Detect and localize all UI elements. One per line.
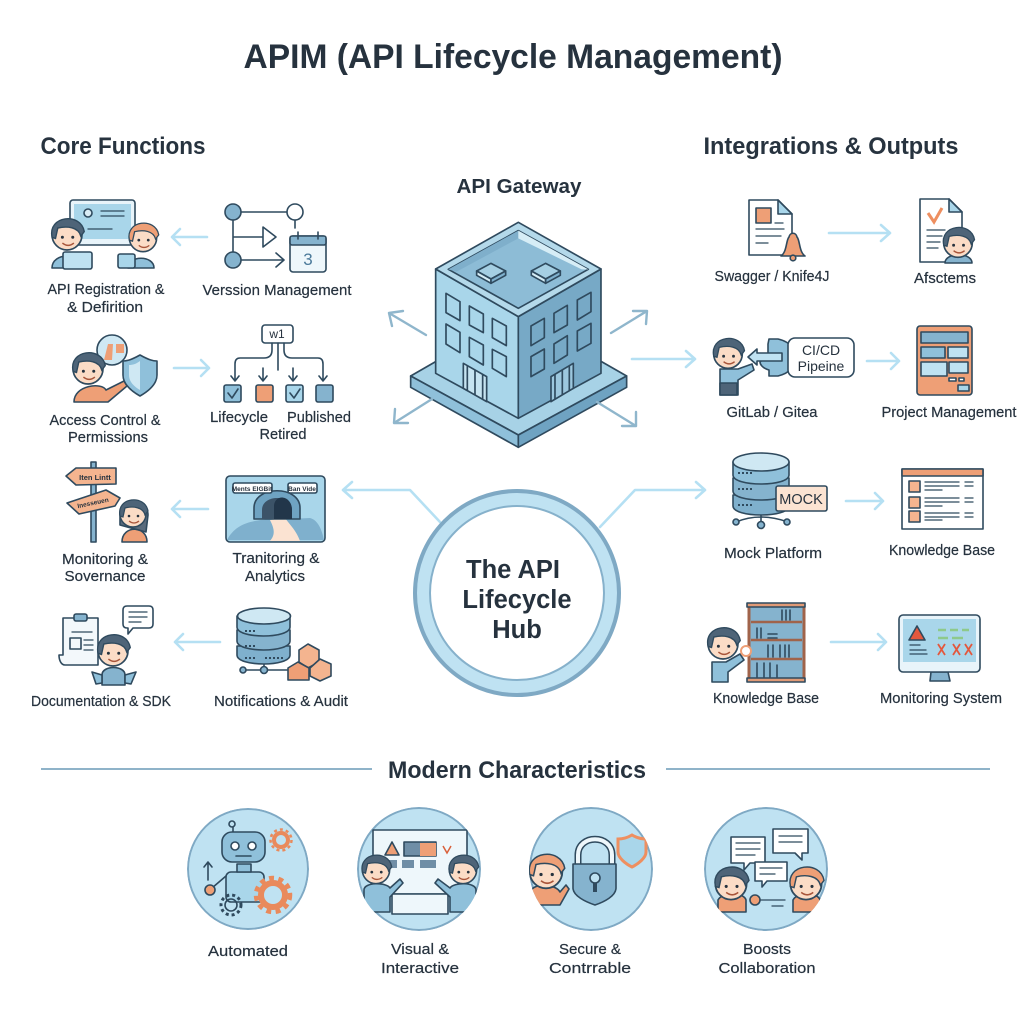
icon: knowledge base window — [902, 469, 983, 529]
label: lifecycle: Lifecycle — [210, 410, 268, 426]
central hub — [415, 491, 619, 695]
label: monitoring: Monitoring & — [62, 552, 148, 568]
arrow: building to CI/CD — [632, 351, 695, 367]
arrow: hub to mock platform — [600, 482, 705, 527]
icon: person with CI/CD pipeline: CI/CD — [802, 342, 840, 358]
label: knowledge base shelf: Knowledge Base — [713, 691, 819, 707]
arrow: building up right — [611, 311, 647, 333]
icon: mock platform: MOCK — [779, 492, 823, 508]
icon: person with CI/CD pipeline — [713, 338, 854, 395]
icon: API gateway building — [411, 222, 627, 447]
icon: database and cubes — [237, 608, 331, 681]
heading: API gateway: API Gateway — [456, 175, 582, 198]
label: published: Published — [287, 410, 351, 426]
icon: lifecycle tree: w1 — [268, 327, 285, 341]
label: analytics: Analytics — [245, 569, 305, 585]
arrow: swagger to artefacts — [829, 225, 890, 241]
title: APIM (API Lifecycle Management) — [244, 38, 782, 76]
label: retired: Retired — [260, 427, 306, 443]
heading: modern characteristics: Modern Characteristics — [388, 757, 646, 784]
icon: lifecycle tree — [224, 325, 333, 402]
arrow: building down right — [597, 402, 636, 426]
label: documentation: Documentation & SDK — [31, 694, 171, 710]
icon: signpost and person — [66, 462, 148, 542]
icon: access control — [73, 335, 157, 402]
icon: document and person — [920, 199, 974, 263]
badge: boosts collaboration — [705, 808, 827, 930]
icon: project management panel — [917, 326, 972, 395]
label: systems: Afsctems — [914, 271, 976, 287]
label: visual: Visual & — [391, 942, 449, 958]
arrow: building down left — [394, 399, 432, 423]
heading: integrations and outputs: Integrations & Outputs — [704, 133, 958, 160]
label: access control: Access Control & — [50, 413, 161, 429]
label: secure: Secure & — [559, 942, 621, 958]
label: boosts: Boosts — [743, 942, 791, 958]
label: collaboration: Collaboration — [718, 961, 816, 977]
arrow: analytics to monitoring — [172, 501, 208, 517]
label: interactive: Interactive — [381, 961, 459, 977]
label: analytics title: Tranitoring & — [232, 551, 320, 567]
icon: version management: 3 — [303, 250, 313, 269]
hub label: The API — [466, 556, 560, 584]
icon: version management — [225, 204, 326, 272]
icon: monitoring system — [899, 615, 980, 681]
label: governance: Sovernance — [64, 569, 146, 585]
hub label: Lifecycle — [462, 586, 572, 614]
icon: tunnel analytics card — [226, 476, 325, 542]
heading: core functions: Core Functions — [40, 133, 206, 160]
badge: secure and controllable — [529, 808, 652, 930]
arrow: version to registration — [172, 229, 207, 245]
label: knowledge base window: Knowledge Base — [889, 543, 995, 559]
badge: visual and interactive — [358, 808, 480, 930]
icon: documentation and person — [59, 606, 153, 685]
icon: tunnel analytics card: Ments ElGBit — [232, 486, 273, 493]
icon: person with CI/CD pipeline: Pipeine — [798, 358, 845, 374]
icon: tunnel analytics card: Ban Vide — [288, 486, 316, 493]
label: controllable: Contrrable — [549, 961, 631, 977]
badge: automated — [188, 809, 308, 929]
arrow: pipeline to project management — [867, 353, 899, 369]
arrow: shelf to monitoring — [831, 634, 886, 650]
label: permissions: Permissions — [68, 430, 148, 446]
arrow: access to lifecycle — [174, 360, 209, 376]
arrow: hub to analytics — [343, 482, 440, 522]
label: monitoring system: Monitoring System — [880, 691, 1002, 707]
label: notifications: Notifications & Audit — [214, 694, 348, 710]
label: swagger: Swagger / Knife4J — [714, 269, 830, 285]
label: version management: Verssion Management — [202, 283, 352, 299]
icon: person and bookshelf — [708, 603, 805, 682]
label: definition: & Defirition — [67, 300, 143, 316]
label: mock platform: Mock Platform — [724, 546, 822, 562]
icon: mock platform — [733, 453, 827, 528]
icon: signpost and person: Inesseuen — [77, 497, 109, 510]
hub label: Hub — [492, 616, 542, 644]
icon: API registration — [52, 200, 159, 269]
icon: swagger document and bell — [749, 200, 805, 261]
arrow: mock to knowledge base — [846, 493, 883, 509]
arrow: notifications to documentation — [175, 634, 220, 650]
label: automated: Automated — [208, 944, 288, 960]
label: API registration: API Registration & — [48, 282, 165, 298]
label: gitlab: GitLab / Gitea — [726, 405, 818, 421]
label: project management: Project Management — [882, 405, 1016, 421]
arrow: building up left — [389, 311, 426, 335]
icon: signpost and person: Iten Lintt — [79, 473, 111, 482]
